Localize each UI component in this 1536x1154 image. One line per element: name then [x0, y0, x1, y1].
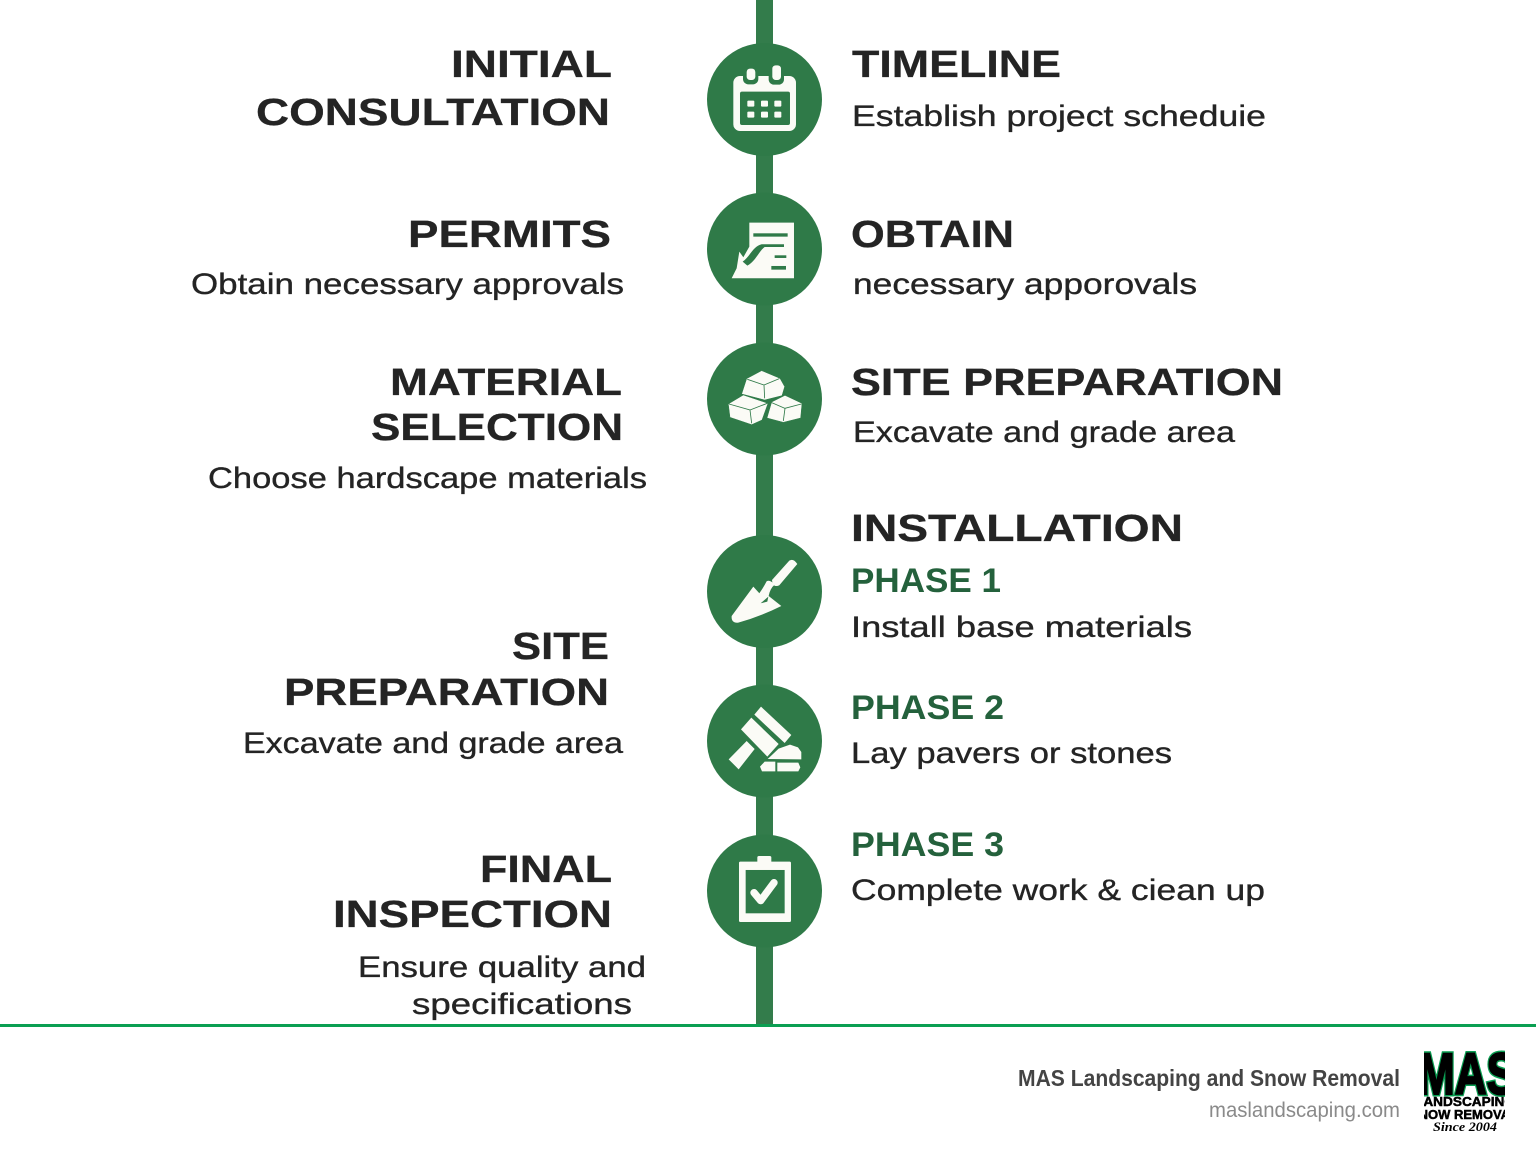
left: permits block [191, 214, 624, 301]
left: initial consultation heading: INITIAL [451, 44, 612, 86]
icon: trowel [732, 560, 797, 623]
footer: MAS logo: SNOW REMOVAL [1410, 1107, 1518, 1122]
step: trowel node [707, 535, 822, 648]
right: timeline block: Establish project scheduie [852, 100, 1266, 133]
step: calendar node [707, 43, 822, 156]
right: installation phase 1 block: PHASE 1 [851, 562, 1001, 600]
left: final inspection block: specifications [412, 988, 632, 1021]
left: final inspection block: Ensure quality and [358, 951, 646, 984]
left: permits block: Obtain necessary approvals [191, 268, 624, 301]
left: material selection block: SELECTION [371, 407, 623, 449]
right: obtain block: necessary apporovals [853, 268, 1197, 301]
footer: MAS logo: LANDSCAPING [1415, 1094, 1515, 1109]
right: site preparation block: Excavate and grade area [853, 416, 1235, 449]
vertical timeline line [756, 0, 773, 1025]
icon: mallet and pavers [729, 707, 801, 771]
left: material selection block: MATERIAL [390, 362, 622, 404]
icon: stacked stone blocks [728, 371, 802, 425]
left: material selection block [208, 362, 647, 495]
footer: company name and website: MAS Landscaping and Snow Removal [1018, 1065, 1400, 1091]
left: site preparation block [243, 626, 623, 760]
right: phase 2 block: PHASE 2 [851, 689, 1004, 727]
footer: company name and website [1018, 1065, 1400, 1122]
right: phase 3 block [851, 826, 1265, 907]
right: timeline block [852, 44, 1266, 133]
right: phase 3 block: PHASE 3 [851, 826, 1004, 864]
right: obtain block [851, 214, 1197, 301]
left: site preparation block: Excavate and grade area [243, 727, 623, 760]
icon: permit document [732, 223, 794, 278]
right: phase 3 block: Complete work & ciean up [851, 874, 1265, 907]
footer rule [0, 1024, 1536, 1027]
right: phase 2 block [851, 689, 1172, 770]
footer: company name and website: maslandscaping.com [1209, 1099, 1400, 1122]
left: final inspection block [333, 849, 646, 1021]
right: timeline block: TIMELINE [852, 44, 1061, 86]
step: permit node [707, 192, 822, 306]
left: initial consultation heading: CONSULTATION [256, 92, 610, 134]
left: initial consultation heading [256, 44, 612, 134]
left: final inspection block: FINAL [480, 849, 612, 891]
footer: MAS logo: Since 2004 [1433, 1119, 1498, 1134]
right: obtain block: OBTAIN [851, 214, 1014, 256]
right: installation phase 1 block: INSTALLATION [851, 508, 1183, 550]
icon: clipboard check [739, 856, 791, 922]
right: installation phase 1 block: Install base materials [851, 611, 1192, 644]
left: material selection block: Choose hardscape materials [208, 462, 647, 495]
right: site preparation block: SITE PREPARATION [851, 362, 1283, 404]
left: permits block: PERMITS [408, 214, 611, 256]
footer: MAS logo [1410, 1042, 1518, 1134]
left: site preparation block: PREPARATION [284, 672, 609, 714]
right: phase 2 block: Lay pavers or stones [851, 737, 1172, 770]
step: materials node [707, 342, 822, 456]
step: inspection node [707, 834, 822, 948]
left: final inspection block: INSPECTION [333, 894, 612, 936]
right: site preparation block [851, 362, 1283, 449]
icon: calendar [733, 63, 796, 131]
right: installation phase 1 block [851, 508, 1192, 644]
step: mallet node [707, 684, 822, 798]
left: site preparation block: SITE [512, 626, 609, 668]
